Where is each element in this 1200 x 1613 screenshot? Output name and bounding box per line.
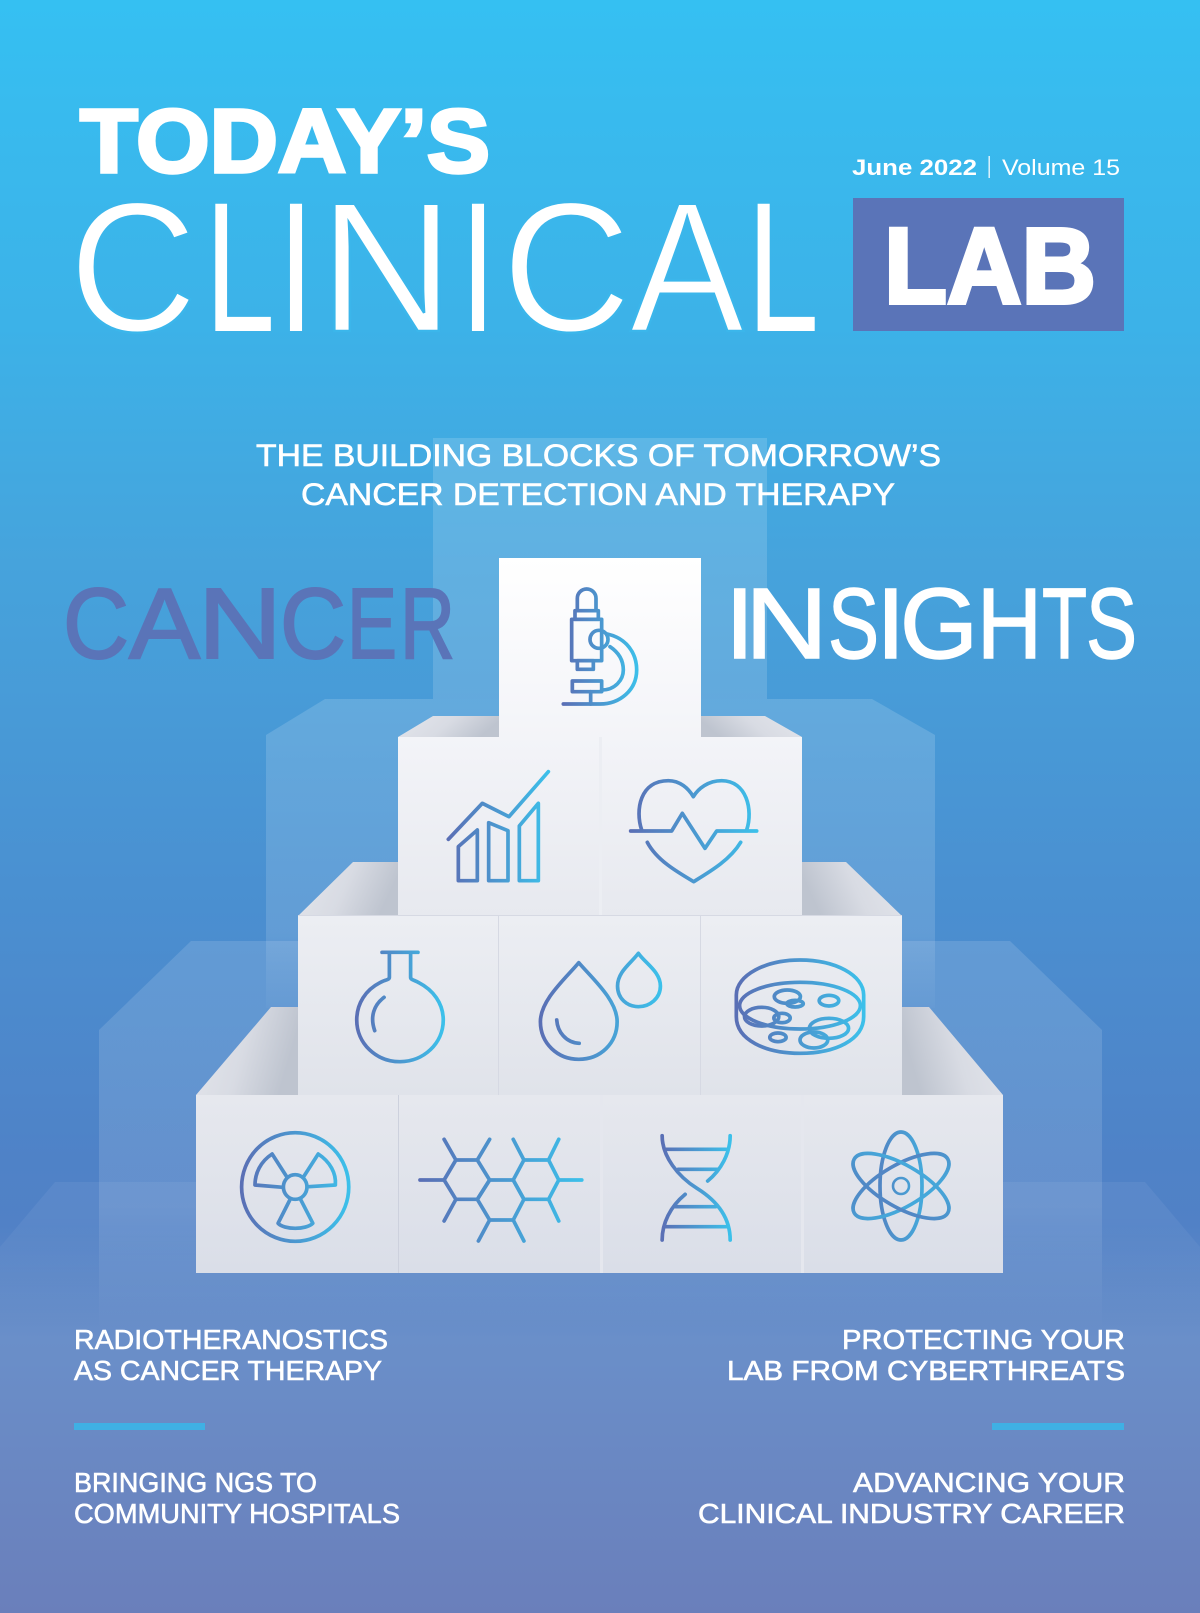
- title: INSIGHTS: I: [725, 568, 754, 680]
- divider right: [992, 1423, 1124, 1430]
- story: career: ADVANCING YOUR: [853, 1467, 1125, 1498]
- row 2 blocks: [398, 737, 802, 916]
- masthead: CLINICAL: A: [630, 165, 745, 371]
- title: CANCER: N: [198, 568, 282, 680]
- title: CANCER: A: [129, 568, 200, 680]
- row 2 top faces: [398, 716, 802, 737]
- row 4 top faces: [196, 1007, 1003, 1095]
- title: INSIGHTS: I: [876, 568, 906, 680]
- title: INSIGHTS: G: [900, 568, 978, 680]
- icon: round flask: [357, 952, 443, 1062]
- row 4 blocks: [196, 1095, 1003, 1273]
- icon: microscope: [563, 589, 637, 704]
- story: radiotheranostics: [74, 1324, 388, 1386]
- story: NGS: BRINGING NGS TO: [74, 1467, 317, 1498]
- story: cyberthreats: PROTECTING YOUR: [842, 1324, 1125, 1355]
- row 3 blocks: [298, 915, 902, 1095]
- title: INSIGHTS: N: [745, 568, 828, 680]
- masthead: CLINICAL: L: [205, 165, 275, 371]
- story: radiotheranostics: AS CANCER THERAPY: [74, 1355, 382, 1386]
- title: CANCER: C: [63, 568, 129, 680]
- story: NGS: [74, 1467, 400, 1529]
- pyramid of blocks: [196, 558, 1003, 1273]
- icon: radiation symbol: [242, 1133, 349, 1241]
- headline: CANCER DETECTION AND THERAPY: [301, 476, 895, 512]
- issue date and volume: [852, 155, 1120, 180]
- icon: blood drops: [540, 953, 660, 1059]
- story: career: [698, 1467, 1125, 1529]
- story: cyberthreats: LAB FROM CYBERTHREATS: [727, 1355, 1125, 1386]
- title: INSIGHTS: S: [828, 568, 879, 680]
- title: INSIGHTS: S: [1086, 568, 1137, 680]
- masthead: CLINICAL: C: [502, 165, 631, 371]
- icon: molecule hexagons: [420, 1139, 582, 1241]
- ghost blocks behind the pyramid: [0, 438, 1200, 1330]
- icon: petri dish: [736, 960, 864, 1053]
- title: INSIGHTS: H: [977, 568, 1042, 680]
- icon: heart with pulse: [631, 781, 757, 882]
- story: cyberthreats: [727, 1324, 1125, 1386]
- story: radiotheranostics: RADIOTHERANOSTICS: [74, 1324, 388, 1355]
- issue date and volume: Volume 15: [1002, 155, 1120, 180]
- icon: growth chart: [448, 772, 548, 881]
- top block: [499, 558, 701, 738]
- icon: DNA helix: [662, 1136, 730, 1240]
- masthead: TODAY'S: TODAY’S: [80, 92, 490, 192]
- issue date and volume: June 2022: [852, 155, 977, 180]
- divider left: [74, 1423, 205, 1430]
- masthead: CLINICAL: C: [69, 165, 197, 371]
- masthead: CLINICAL: L: [747, 165, 819, 371]
- title: CANCER: E: [347, 568, 397, 680]
- headline: THE BUILDING BLOCKS OF TOMORROW’S: [256, 437, 941, 473]
- masthead: CLINICAL: I: [460, 165, 496, 371]
- masthead: LAB box: LAB: [884, 205, 1096, 326]
- title: CANCER: R: [400, 568, 455, 680]
- masthead: CLINICAL: N: [319, 165, 454, 371]
- title: INSIGHTS: T: [1042, 568, 1087, 680]
- row 3 top faces: [298, 862, 902, 916]
- story: NGS: COMMUNITY HOSPITALS: [74, 1498, 400, 1529]
- story: career: CLINICAL INDUSTRY CAREER: [698, 1498, 1125, 1529]
- headline: [256, 437, 941, 512]
- title: CANCER: C: [280, 568, 346, 680]
- icon: atom: [844, 1132, 958, 1240]
- masthead: CLINICAL: I: [278, 165, 314, 371]
